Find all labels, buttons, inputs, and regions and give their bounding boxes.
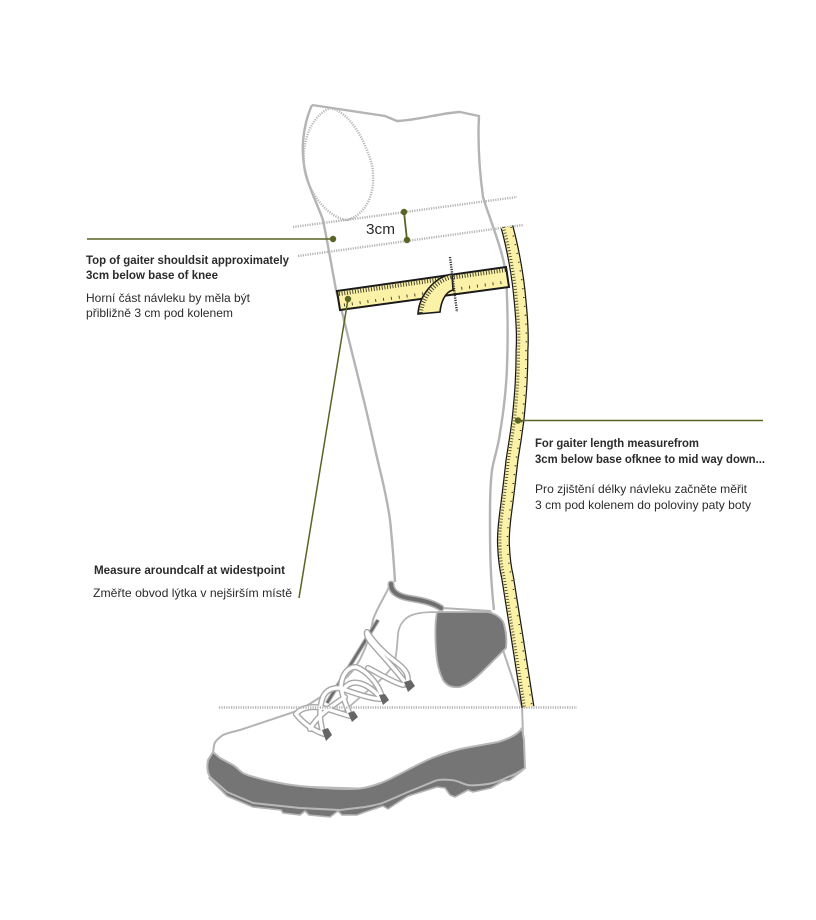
text: gaiter length: Pro zjištění délky návleku začněte měřit [535, 482, 748, 496]
boot upper [213, 585, 523, 790]
leg outline [303, 105, 508, 610]
calf ruler with protractor [337, 257, 509, 314]
dotted sole reference line [219, 706, 577, 709]
text: top of gaiter: 3cm below base of knee [86, 268, 218, 282]
heel patch [435, 612, 506, 687]
boot lugs [209, 765, 523, 817]
text: calf measurement: Změřte obvod lýtka v nejširším místě [93, 586, 292, 600]
leader: calf [299, 296, 351, 598]
text: top of gaiter: Top of gaiter shouldsit approximately [86, 253, 289, 267]
text: top of gaiter: přibližně 3 cm pod kolenem [86, 306, 233, 320]
boot collar band [391, 584, 441, 608]
text: top of gaiter: Horní část návleku by měla být [86, 291, 251, 305]
boot [207, 584, 525, 817]
text: gaiter length [535, 436, 765, 512]
leader: top of gaiter [87, 236, 336, 242]
text: gaiter length: 3 cm pod kolenem do poloviny paty boty [535, 498, 751, 512]
boot tongue lines [343, 612, 436, 712]
dotted knee reference lines [293, 197, 523, 256]
boot eyestay strip [327, 620, 378, 703]
leader: gaiter length [515, 417, 763, 424]
lace tips [322, 680, 415, 741]
knee cap dotted outline [304, 108, 373, 220]
text: calf measurement [93, 563, 292, 600]
3cm marker: 3cm [366, 221, 395, 238]
length ruler [500, 227, 532, 707]
boot laces [296, 632, 408, 734]
text: calf measurement: Measure aroundcalf at widestpoint [94, 563, 285, 577]
boot sole [207, 728, 525, 810]
text: gaiter length: 3cm below base ofknee to mid way down... [535, 452, 765, 466]
text: top of gaiter [86, 253, 289, 320]
3cm marker [366, 209, 410, 243]
text: gaiter length: For gaiter length measurefrom [535, 436, 699, 450]
